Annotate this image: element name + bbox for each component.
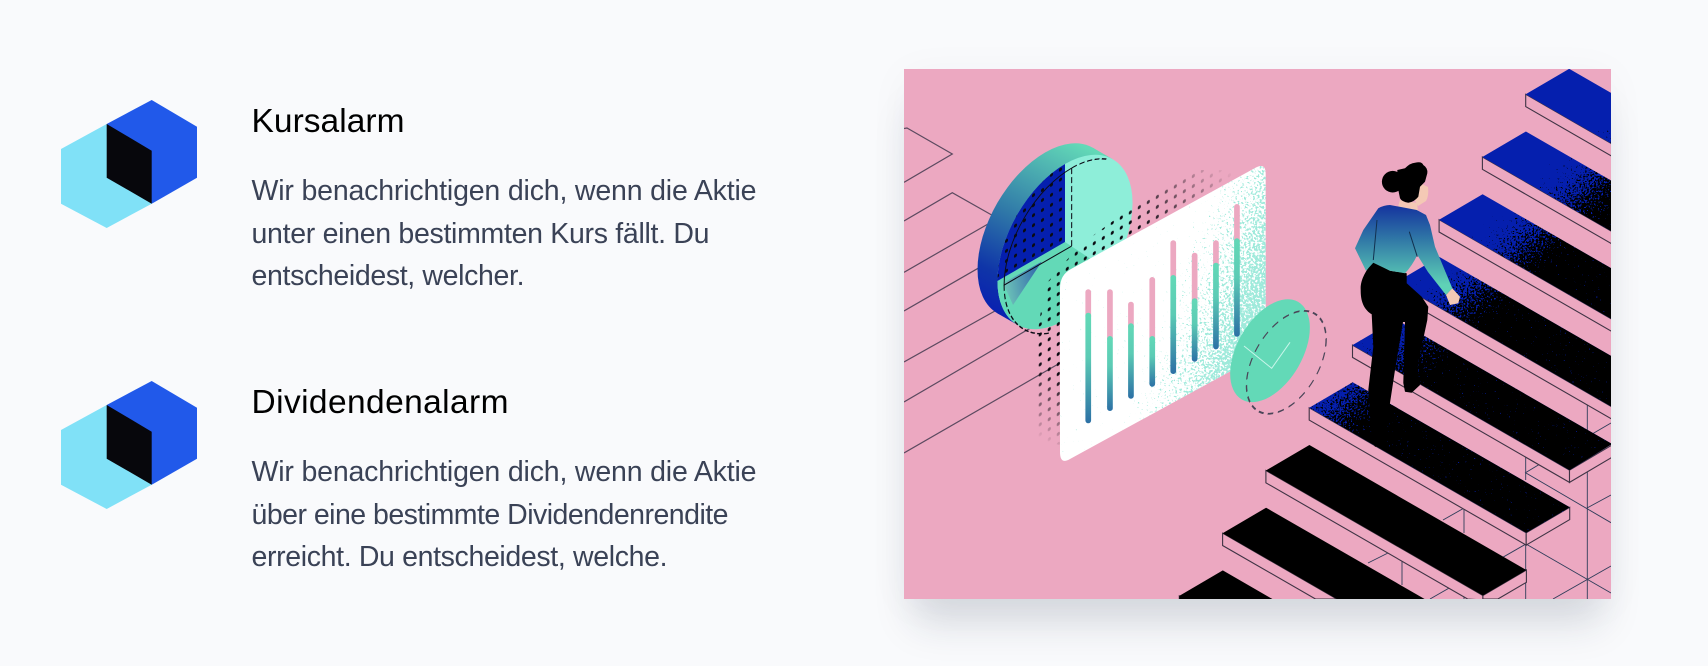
- heading: Dividendenalarm: Dividendenalarm: [252, 384, 508, 421]
- icon: check badge: [1230, 299, 1327, 415]
- text block: Kursalarm description: [252, 175, 756, 292]
- panel: illustration: [904, 69, 1612, 600]
- staircase: [1179, 69, 1612, 600]
- text block: Dividendenalarm description: Wir benachrichtigen dich, wenn die Aktie: [252, 456, 756, 488]
- figure: woman climbing stairs: [1355, 162, 1460, 447]
- text block: Kursalarm description: entscheidest, welcher.: [252, 260, 524, 292]
- icon: hexagon blocks, Dividendenalarm: [61, 381, 197, 509]
- text block: Kursalarm description: unter einen bestimmten Kurs fällt. Du: [252, 218, 710, 250]
- heading: Kursalarm: Kursalarm: [252, 103, 404, 140]
- chart: isometric pie: [978, 143, 1133, 334]
- text block: Dividendenalarm description: über eine bestimmte Dividendenrendite: [252, 499, 728, 531]
- card: bar chart: [1060, 162, 1266, 465]
- text block: Dividendenalarm description: [252, 456, 756, 573]
- icon: hexagon blocks, Kursalarm: [61, 100, 197, 228]
- text block: Kursalarm description: Wir benachrichtigen dich, wenn die Aktie: [252, 175, 756, 207]
- halftone dots: [1038, 170, 1240, 445]
- panel shadow: [904, 69, 1611, 599]
- text block: Dividendenalarm description: erreicht. Du entscheidest, welche.: [252, 541, 668, 573]
